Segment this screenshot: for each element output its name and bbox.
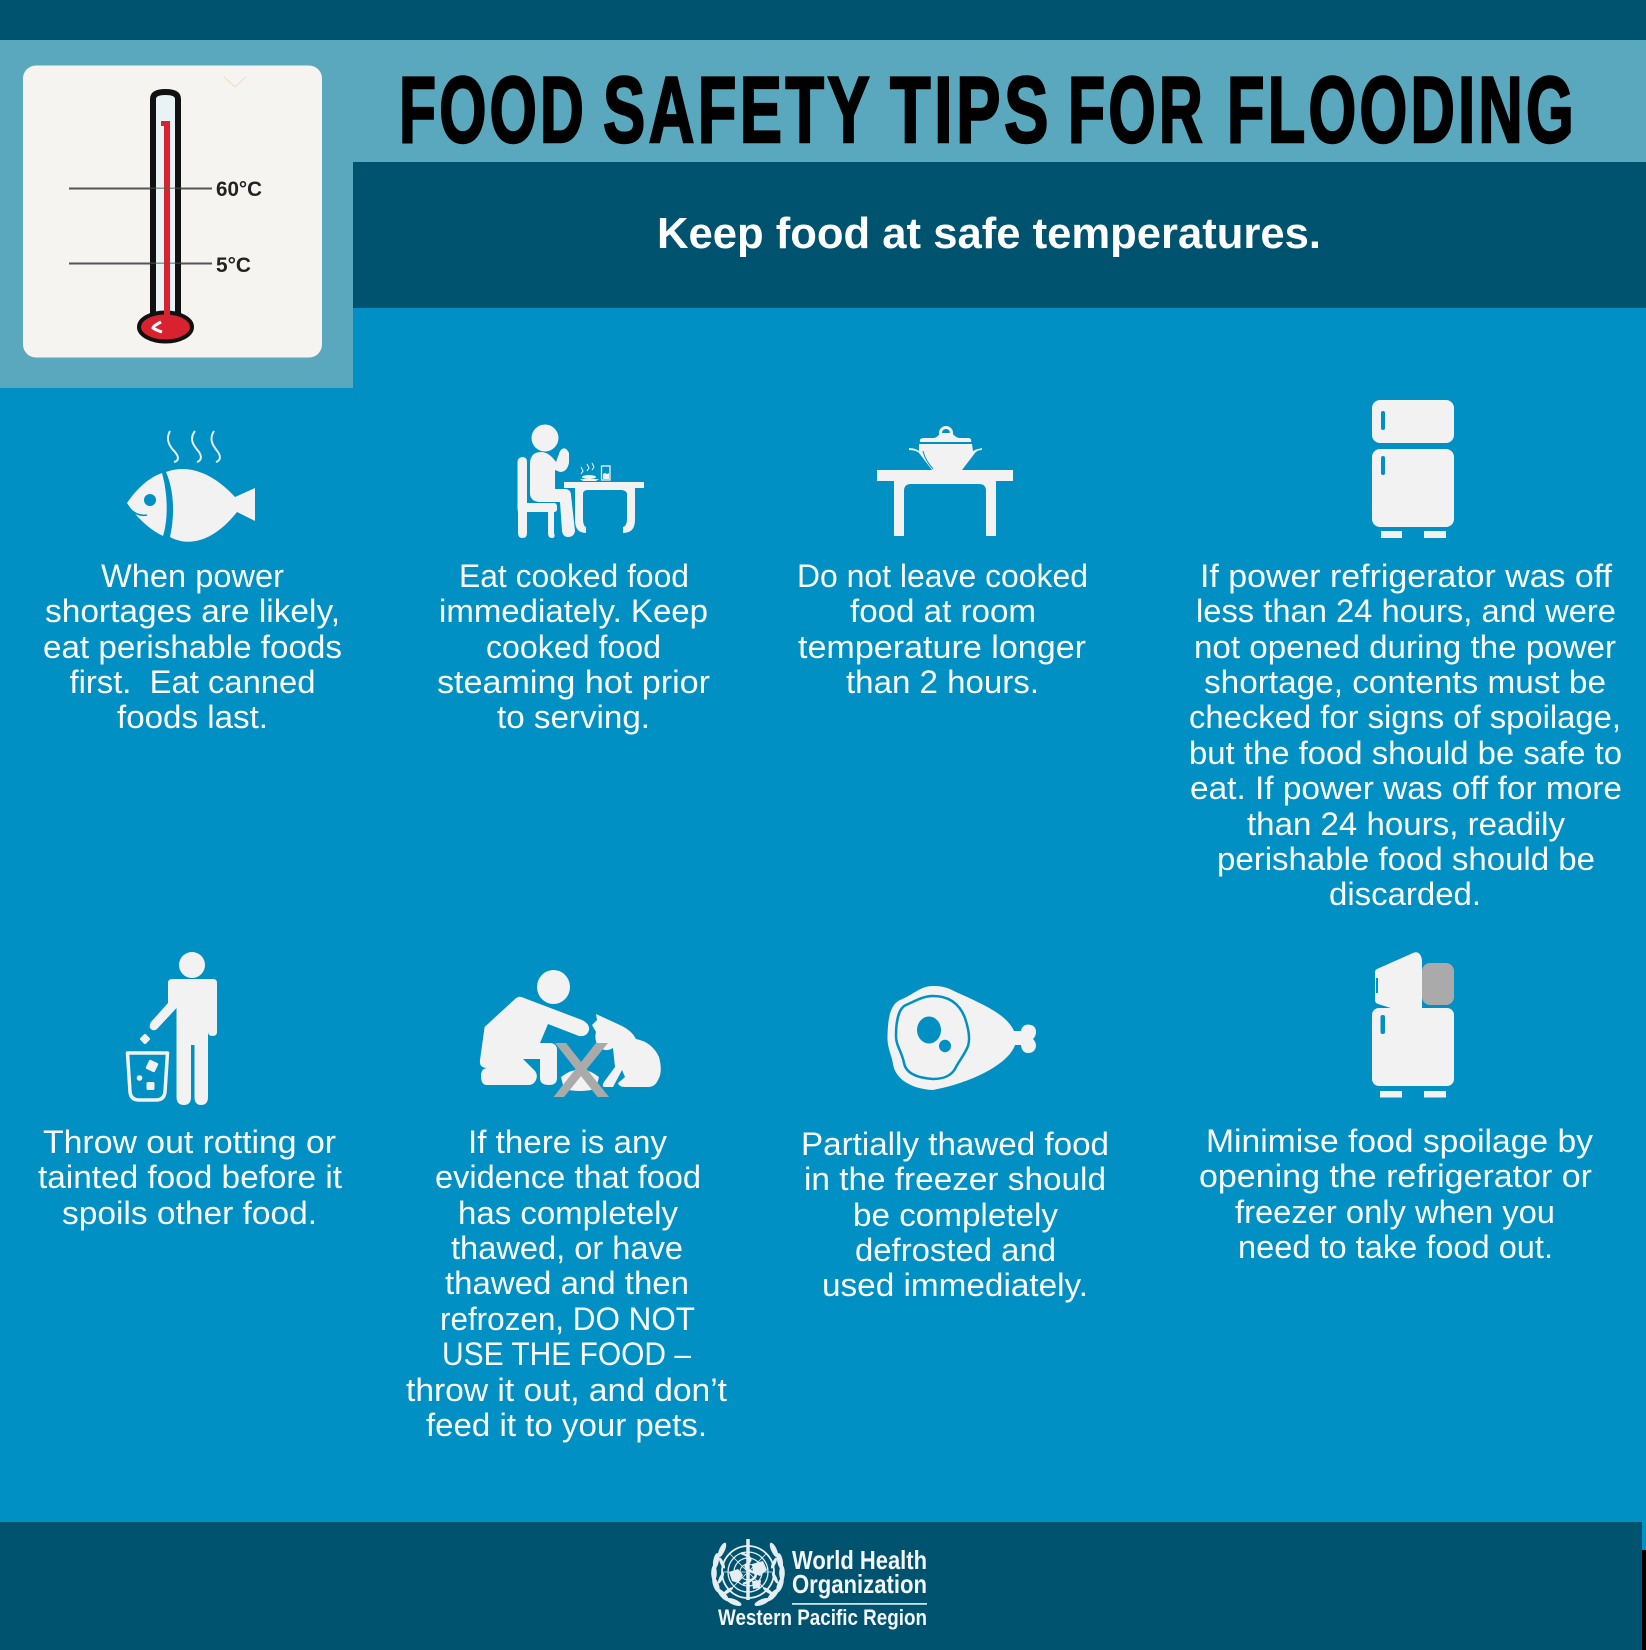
icon: pot on table bbox=[877, 428, 1013, 536]
text: refrigerator power off bbox=[1189, 558, 1622, 912]
text: minimise food spoilage: opening the refrigerator or bbox=[1199, 1158, 1592, 1194]
WHO logo: World Health bbox=[792, 1545, 927, 1575]
text: partially thawed food: Partially thawed food bbox=[801, 1126, 1109, 1162]
text: throw out rotting food: Throw out rotting or bbox=[43, 1124, 336, 1160]
text: do not leave cooked food: than 2 hours. bbox=[846, 664, 1039, 700]
icon: person feeding pet with cross bbox=[480, 970, 661, 1097]
icon: refrigerator closed bbox=[1372, 400, 1454, 538]
text: do not leave cooked food bbox=[797, 558, 1088, 700]
icon: person eating at table bbox=[518, 424, 644, 538]
text: do not use thawed food: evidence that food bbox=[435, 1159, 701, 1195]
icon: person throwing food in bin bbox=[128, 952, 217, 1105]
text: perishable foods first: foods last. bbox=[117, 699, 268, 735]
thermometer card: 5°C bbox=[216, 254, 251, 277]
text: minimise food spoilage: need to take food out. bbox=[1238, 1229, 1553, 1265]
text: eat cooked food immediately: to serving. bbox=[497, 699, 650, 735]
text: perishable foods first: shortages are likely, bbox=[45, 593, 340, 629]
text: refrigerator power off: eat. If power was off for more bbox=[1190, 770, 1622, 806]
footer band bbox=[0, 1522, 1642, 1650]
text: refrigerator power off: perishable food should be bbox=[1217, 841, 1595, 877]
title: TIPS bbox=[890, 57, 1052, 162]
text: partially thawed food: be completely bbox=[853, 1197, 1058, 1233]
text: do not use thawed food: If there is any bbox=[468, 1124, 667, 1160]
text: partially thawed food: defrosted and bbox=[855, 1232, 1056, 1268]
subtitle banner bbox=[353, 162, 1646, 308]
text: partially thawed food: in the freezer should bbox=[804, 1161, 1106, 1197]
header panel: light blue bbox=[0, 40, 1646, 388]
text: perishable foods first: When power bbox=[101, 558, 284, 594]
text: refrigerator power off: If power refrigerator was off bbox=[1200, 558, 1612, 594]
text: partially thawed food: used immediately. bbox=[822, 1267, 1088, 1303]
text: do not use thawed food: thawed and then bbox=[445, 1265, 689, 1301]
title: SAFETY bbox=[603, 57, 873, 162]
text: throw out rotting food bbox=[38, 1124, 342, 1231]
text: eat cooked food immediately: steaming hot prior bbox=[437, 664, 710, 700]
top band bbox=[0, 0, 1646, 40]
text: minimise food spoilage: Minimise food spoilage by bbox=[1206, 1123, 1593, 1159]
text: perishable foods first: first. Eat canned bbox=[70, 664, 316, 700]
text: do not use thawed food: has completely bbox=[458, 1195, 678, 1231]
text: refrigerator power off: checked for signs of spoilage, bbox=[1189, 699, 1621, 735]
text: throw out rotting food: spoils other food. bbox=[62, 1195, 317, 1231]
text: do not leave cooked food: food at room bbox=[850, 593, 1036, 629]
text: do not use thawed food bbox=[406, 1124, 727, 1443]
subtitle banner: Keep food at safe temperatures. bbox=[657, 209, 1321, 258]
text: eat cooked food immediately bbox=[437, 558, 710, 735]
text: do not leave cooked food: temperature longer bbox=[798, 629, 1086, 665]
text: do not use thawed food: feed it to your pets. bbox=[426, 1407, 707, 1443]
title: FOOD bbox=[399, 57, 587, 162]
text: do not use thawed food: throw it out, and don’t bbox=[406, 1372, 727, 1408]
text: refrigerator power off: not opened during the power bbox=[1194, 629, 1616, 665]
text: do not use thawed food: USE THE FOOD – bbox=[442, 1336, 691, 1372]
text: refrigerator power off: discarded. bbox=[1329, 876, 1481, 912]
text: refrigerator power off: shortage, contents must be bbox=[1204, 664, 1606, 700]
text: refrigerator power off: less than 24 hours, and were bbox=[1196, 593, 1616, 629]
WHO logo: Organization bbox=[792, 1569, 927, 1599]
text: do not use thawed food: refrozen, DO NOT bbox=[440, 1301, 695, 1337]
WHO logo: Western Pacific Region bbox=[718, 1605, 927, 1630]
text: throw out rotting food: tainted food before it bbox=[38, 1159, 342, 1195]
text: refrigerator power off: but the food should be safe to bbox=[1189, 735, 1622, 771]
WHO emblem bbox=[711, 1539, 785, 1608]
text: eat cooked food immediately: Eat cooked food bbox=[459, 558, 689, 594]
thermometer card bbox=[23, 66, 322, 358]
icon: ham bbox=[887, 986, 1036, 1090]
text: partially thawed food bbox=[801, 1126, 1109, 1303]
text: perishable foods first bbox=[43, 558, 342, 735]
thermometer card: 60°C bbox=[216, 178, 262, 201]
text: perishable foods first: eat perishable foods bbox=[43, 629, 342, 665]
text: minimise food spoilage bbox=[1199, 1123, 1593, 1265]
WHO logo bbox=[711, 1539, 927, 1630]
title bbox=[399, 57, 1577, 162]
icon: fish with steam bbox=[127, 431, 255, 542]
text: refrigerator power off: than 24 hours, readily bbox=[1247, 806, 1565, 842]
text: do not leave cooked food: Do not leave cooked bbox=[797, 558, 1088, 594]
text: eat cooked food immediately: cooked food bbox=[486, 629, 661, 665]
icon: refrigerator with open door bbox=[1372, 952, 1454, 1098]
title: FOR bbox=[1068, 57, 1206, 162]
text: minimise food spoilage: freezer only when you bbox=[1235, 1194, 1555, 1230]
text: do not use thawed food: thawed, or have bbox=[451, 1230, 683, 1266]
text: eat cooked food immediately: immediately. Keep bbox=[439, 593, 708, 629]
